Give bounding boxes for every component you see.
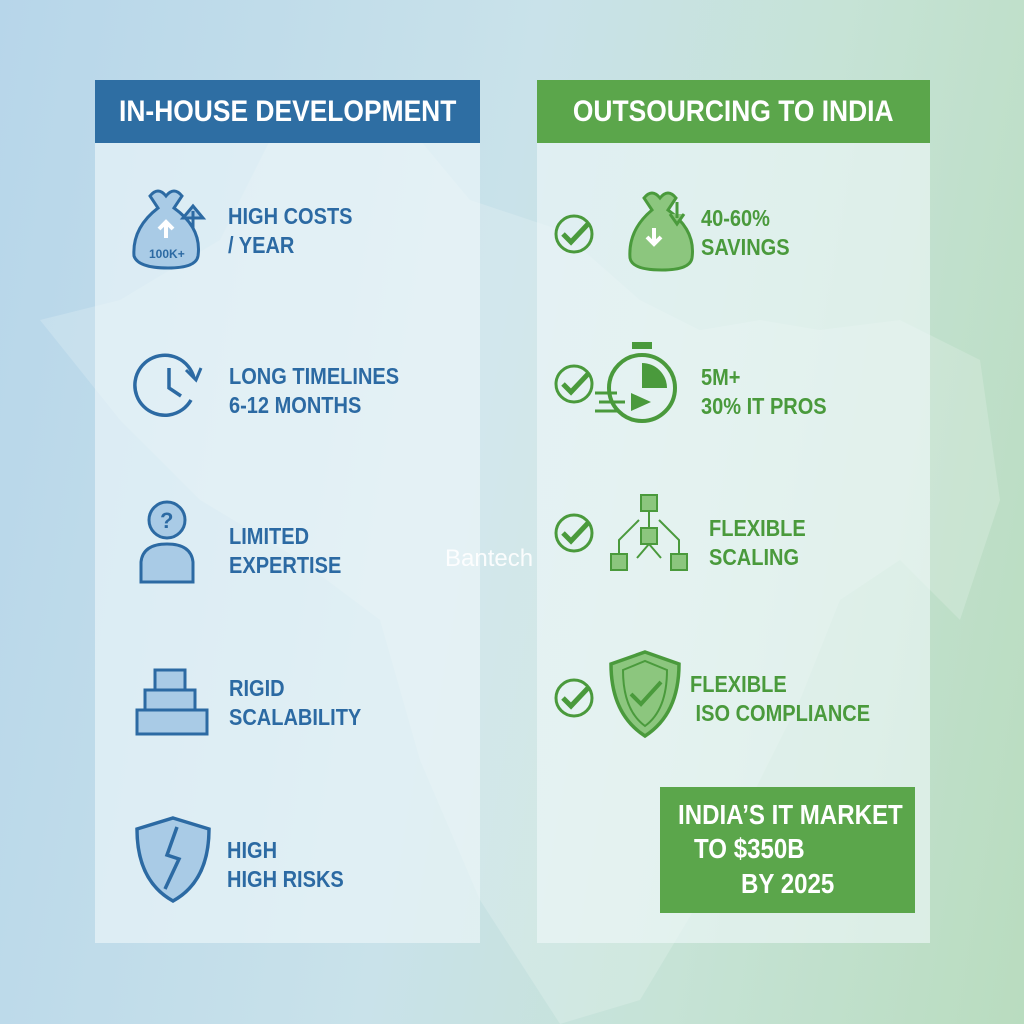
heading: in-house — [95, 80, 480, 143]
text: iso compliance — [690, 671, 870, 726]
text: long timelines: 6-12 MONTHS — [229, 392, 361, 418]
text: limited expertise: EXPERTISE — [229, 552, 341, 578]
icon: stacked boxes — [136, 668, 208, 736]
text: limited expertise — [229, 523, 341, 578]
text: high risks: HIGH RISKS — [227, 866, 344, 892]
callout: india it market: BY 2025 — [741, 868, 834, 899]
text: iso compliance: FLEXIBLE — [690, 671, 787, 697]
heading: outsourcing — [537, 80, 930, 143]
watermark: Bantech — [445, 545, 533, 572]
text: flexible scaling — [709, 515, 806, 570]
icon: check 1 — [554, 214, 594, 254]
icon: check 2 — [554, 364, 594, 404]
callout: india it market: TO $350B — [694, 833, 805, 864]
icon: person question — [140, 500, 194, 584]
text: long timelines — [229, 363, 399, 418]
text: savings: SAVINGS — [701, 234, 790, 260]
icon: check 4 — [554, 678, 594, 718]
panel: in-house development — [95, 80, 480, 943]
text: savings: 40-60% — [701, 205, 770, 231]
icon: broken shield — [135, 816, 211, 903]
text: it pros: 30% IT PROS — [701, 393, 827, 419]
icon: money bag down — [628, 192, 694, 272]
callout: india it market — [660, 787, 915, 913]
text: rigid scalability: RIGID — [229, 675, 285, 701]
text: limited expertise: LIMITED — [229, 523, 309, 549]
icon: check 3 — [554, 514, 594, 552]
icon: shield check — [609, 650, 681, 738]
icon: money bag up: 100K+ — [149, 247, 185, 261]
text: it pros — [701, 364, 827, 419]
text: high costs: / YEAR — [228, 232, 294, 258]
icon: money bag up — [132, 190, 206, 270]
text: savings — [701, 205, 790, 260]
icon: person question: ? — [160, 508, 173, 533]
heading: in-house: IN-HOUSE DEVELOPMENT — [119, 95, 456, 128]
text: flexible scaling: FLEXIBLE — [709, 515, 806, 541]
text: long timelines: LONG TIMELINES — [229, 363, 399, 389]
text: iso compliance: ISO COMPLIANCE — [696, 700, 870, 726]
icon: stopwatch — [595, 342, 677, 423]
text: high risks: HIGH — [227, 837, 277, 863]
text: rigid scalability: SCALABILITY — [229, 704, 361, 730]
text: high risks — [227, 837, 344, 892]
heading: outsourcing: OUTSOURCING TO INDIA — [573, 95, 894, 128]
text: flexible scaling: SCALING — [709, 544, 799, 570]
icon: clock — [133, 354, 202, 417]
callout: india it market: INDIA’S IT MARKET — [678, 799, 903, 830]
text: high costs — [228, 203, 353, 258]
text: rigid scalability — [229, 675, 361, 730]
text: it pros: 5M+ — [701, 364, 740, 390]
text: high costs: HIGH COSTS — [228, 203, 353, 229]
panel: outsourcing to india — [537, 80, 930, 943]
icon: network cubes — [610, 494, 688, 571]
